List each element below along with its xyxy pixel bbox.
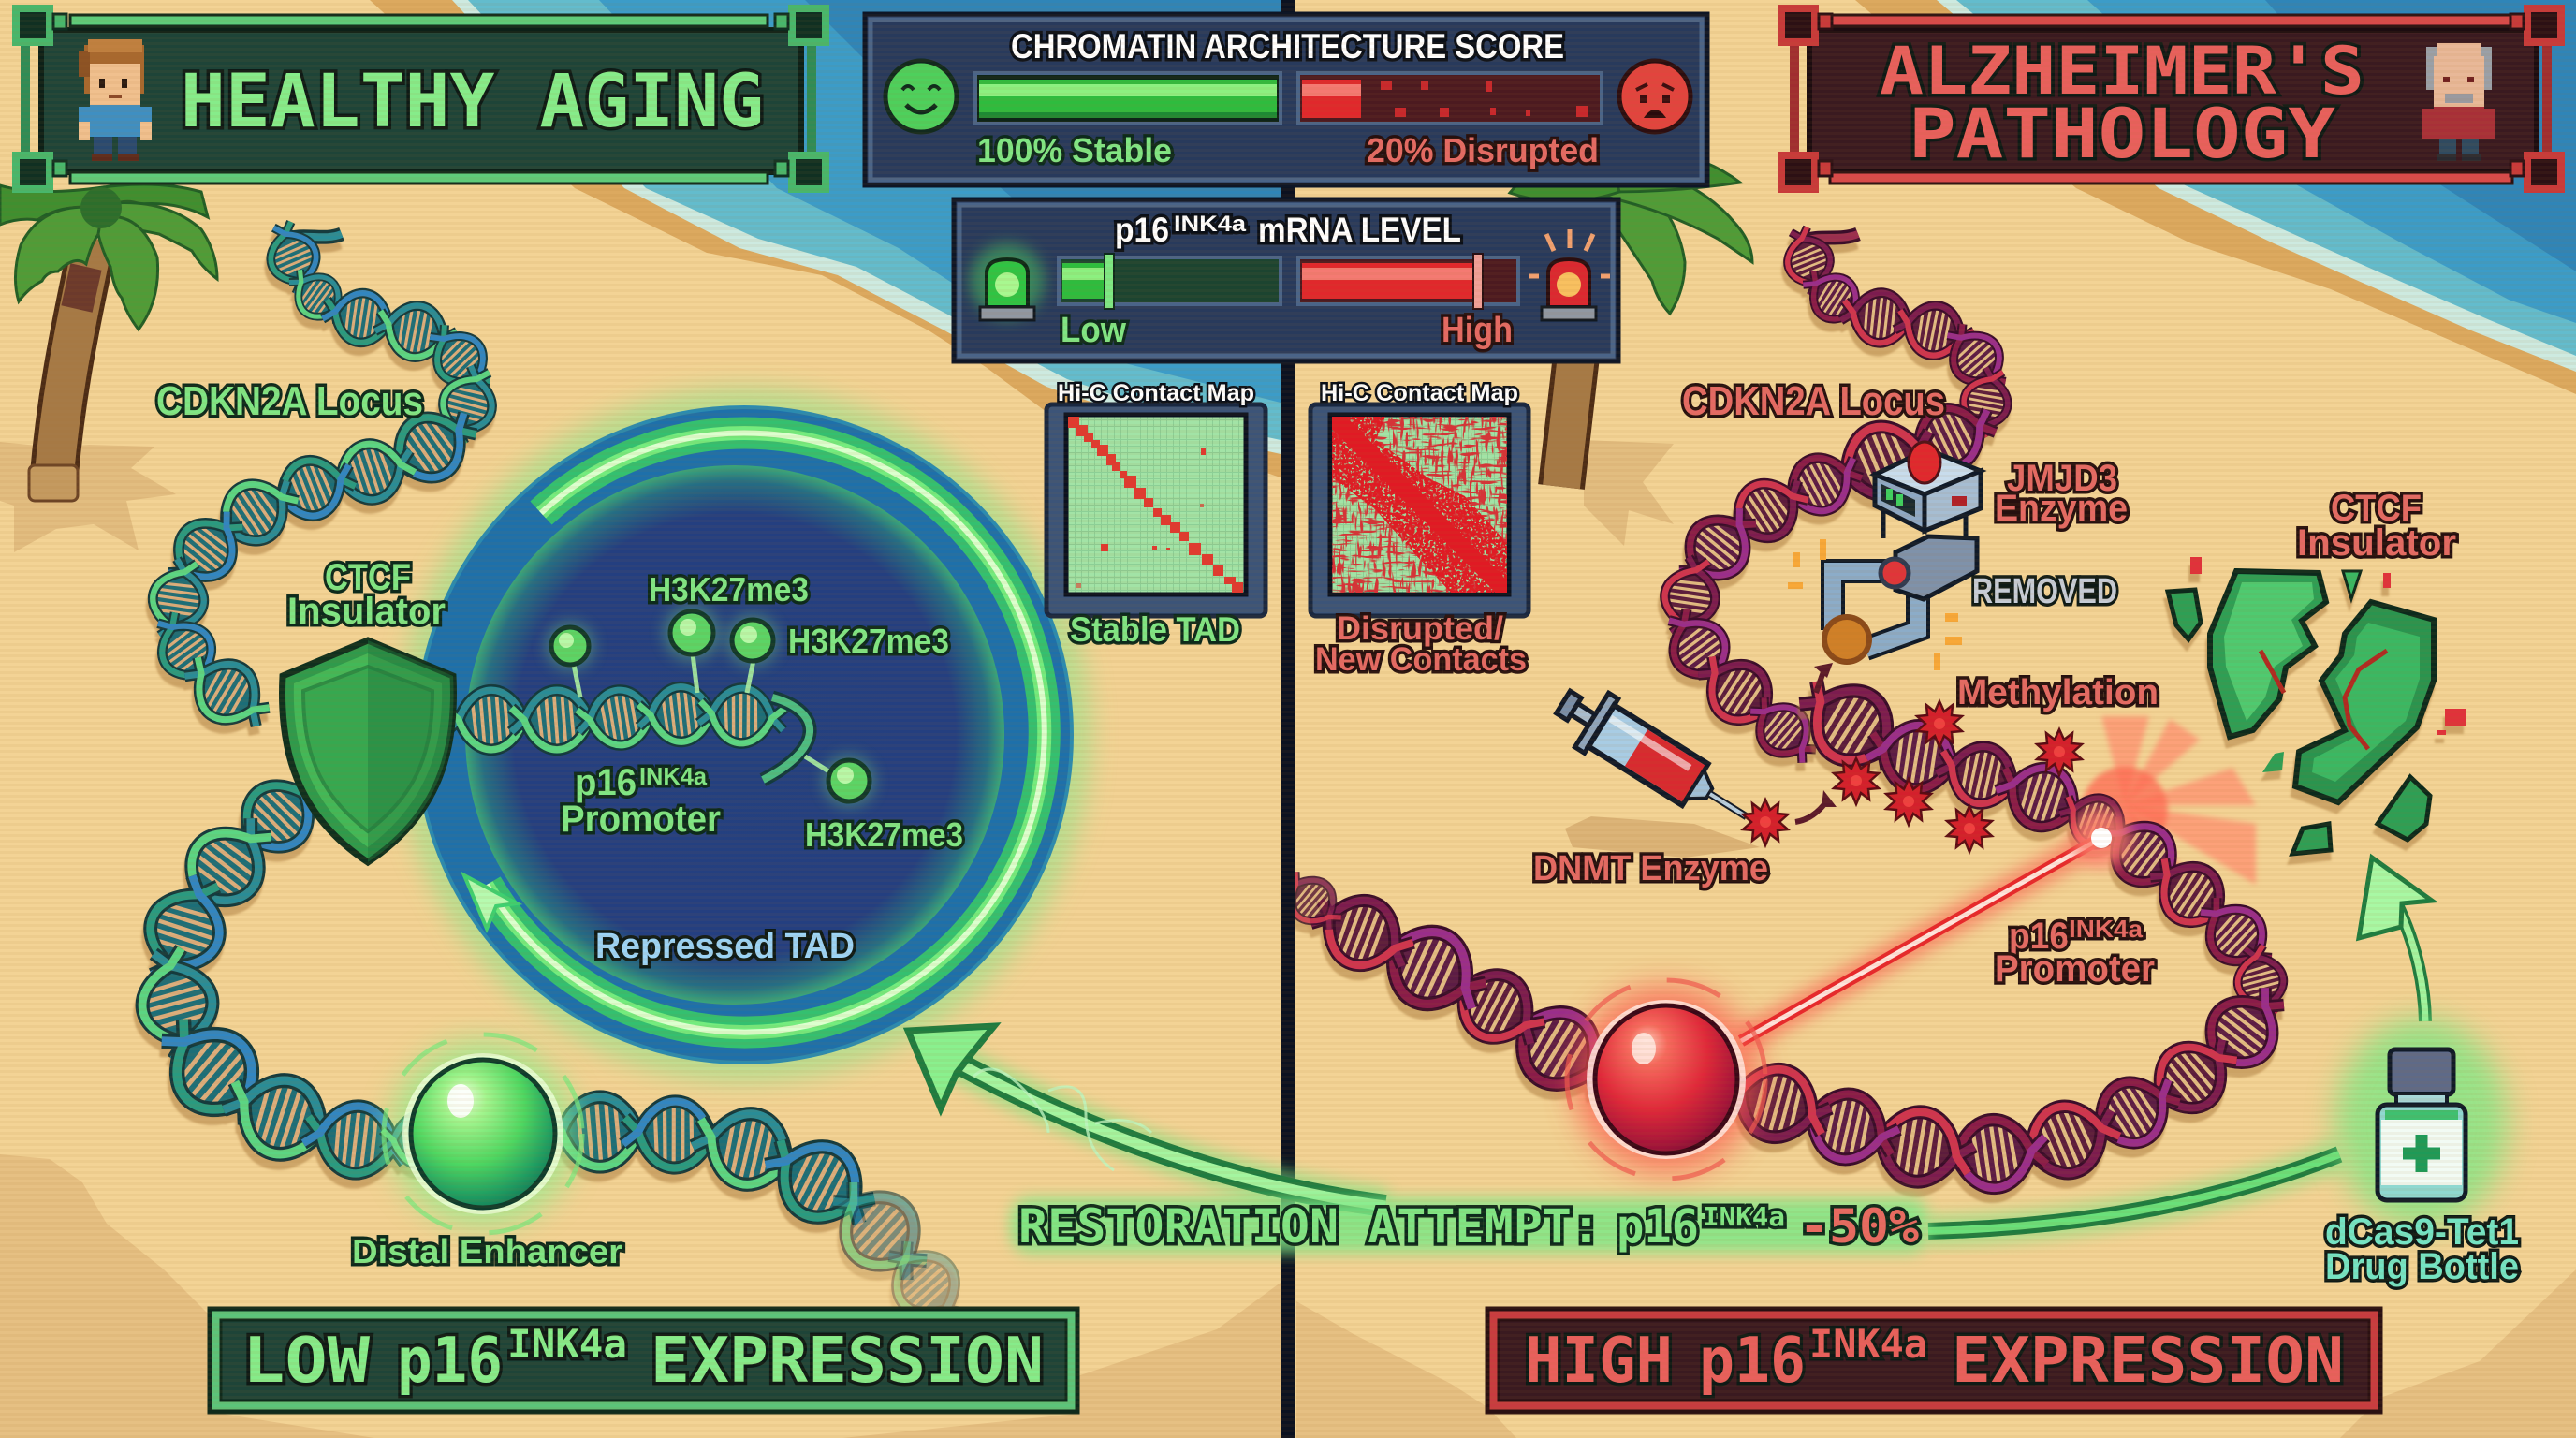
label: p16 promoter healthy: INK4a bbox=[639, 762, 708, 790]
label: JMJD3 Enzyme: Enzyme bbox=[1995, 488, 2128, 529]
Hi-C map: disrupted bbox=[1310, 404, 1529, 616]
label: p16 promoter healthy: Promoter bbox=[561, 799, 721, 840]
banner title: Alzheimer's pathology: PATHOLOGY bbox=[1909, 95, 2335, 174]
arrow head on TAD ring bbox=[464, 875, 517, 929]
DNA: right upper strand bbox=[1656, 224, 2017, 773]
icon: syringe bbox=[1546, 675, 1763, 844]
label: REMOVED: REMOVED bbox=[1972, 572, 2117, 611]
label: Low: Low bbox=[1061, 311, 1126, 350]
label: Disrupted / New Contacts: Disrupted/ bbox=[1337, 610, 1503, 647]
label: H3K27me3 lower: H3K27me3 bbox=[805, 815, 963, 854]
banner: Alzheimer's pathology bbox=[1781, 8, 2561, 189]
icon: dCas9-Tet1 drug bottle bbox=[2335, 1019, 2508, 1228]
label: Hi-C Contact Map left: Hi-C Contact Map bbox=[1058, 380, 1254, 406]
label: p16 promoter disease: p16 bbox=[2009, 916, 2069, 957]
background: right ocean bbox=[1855, 0, 2576, 394]
DNA: left upper strand CDKN2A bbox=[145, 217, 504, 741]
TAD interior disc bbox=[465, 465, 1004, 1005]
label: CDKN2A Locus disease: CDKN2A Locus bbox=[1682, 378, 1945, 424]
footer text: high expression: INK4a bbox=[1809, 1321, 1927, 1367]
banner title: Alzheimer's pathology: ALZHEIMER'S bbox=[1880, 33, 2364, 110]
label: Distal Enhancer: Distal Enhancer bbox=[352, 1232, 622, 1270]
footer banner: low expression bbox=[210, 1309, 1077, 1412]
DNA: left lower strand with enhancer bbox=[132, 761, 976, 1338]
label: Stable TAD: Stable TAD bbox=[1070, 610, 1240, 649]
panel title: p16 mRNA level: INK4a bbox=[1174, 212, 1247, 237]
methylation marks bbox=[1743, 663, 2082, 852]
footer text: high expression: p16 bbox=[1699, 1324, 1806, 1397]
label: High: High bbox=[1442, 311, 1513, 350]
syringe shadow bbox=[1565, 816, 1760, 858]
burst at promoter bbox=[2082, 716, 2256, 899]
restoration label: INK4a bbox=[1703, 1201, 1785, 1232]
bar: high mRNA bbox=[1298, 254, 1518, 309]
label: CDKN2A Locus healthy: CDKN2A Locus bbox=[156, 378, 423, 424]
label: Disrupted / New Contacts: New Contacts bbox=[1315, 641, 1527, 678]
label: H3K27me3 top: H3K27me3 bbox=[649, 570, 809, 609]
label: Hi-C Contact Map right: Hi-C Contact Map bbox=[1321, 380, 1518, 406]
icon: red siren bbox=[1530, 229, 1610, 320]
center divider bbox=[1281, 0, 1295, 1438]
label: DNMT Enzyme: DNMT Enzyme bbox=[1533, 849, 1768, 888]
Hi-C map: stable bbox=[1046, 404, 1266, 616]
panel: chromatin architecture score bbox=[865, 14, 1707, 185]
footer text: high expression: HIGH bbox=[1525, 1324, 1673, 1397]
background: darker sand dunes bbox=[0, 1154, 2576, 1438]
label: dCas9-Tet1 Drug Bottle: dCas9-Tet1 bbox=[2325, 1211, 2519, 1253]
label: CTCF Insulator healthy: CTCF bbox=[325, 557, 411, 598]
label: p16 promoter healthy: p16 bbox=[575, 762, 637, 803]
icon: CTCF shield bbox=[282, 640, 454, 862]
palm tree: left bbox=[0, 184, 217, 552]
distal enhancer sphere bbox=[384, 1034, 582, 1233]
DNA: promoter inside TAD bbox=[446, 684, 810, 780]
panel title: p16 mRNA level: p16 bbox=[1115, 211, 1169, 249]
background: left ocean bbox=[370, 0, 1281, 477]
TAD loop: glowing ring bbox=[415, 405, 1074, 1064]
pathological enhancer sphere bbox=[1567, 980, 1765, 1179]
icon: young man bbox=[79, 39, 152, 161]
label: Repressed TAD: Repressed TAD bbox=[595, 927, 855, 966]
restoration label: -50% bbox=[1799, 1199, 1919, 1254]
icon: JMJD3 enzyme robot bbox=[1788, 442, 1981, 670]
panel title: p16 mRNA level: mRNA LEVEL bbox=[1258, 211, 1461, 249]
green restoration arrow: from bottle bbox=[1928, 1154, 2339, 1231]
footer text: low expression: EXPRESSION bbox=[651, 1324, 1044, 1397]
icon: sad face bbox=[1619, 61, 1690, 132]
label: CTCF Insulator disease: Insulator bbox=[2297, 522, 2456, 564]
icon: happy face bbox=[886, 61, 957, 132]
label: 100% Stable: 100% Stable bbox=[977, 131, 1172, 169]
restoration label: p16 bbox=[1617, 1199, 1699, 1254]
bar: disrupted bbox=[1298, 73, 1602, 124]
label: p16 promoter disease: INK4a bbox=[2069, 915, 2144, 943]
label: JMJD3 Enzyme: JMJD3 bbox=[2007, 458, 2117, 499]
label: 20% Disrupted: 20% Disrupted bbox=[1367, 131, 1599, 169]
DNA: right methylated strand and loop bbox=[1275, 664, 2298, 1194]
laser beam from enhancer to promoter bbox=[1741, 808, 2131, 1041]
palm tree: right bbox=[1510, 151, 1752, 546]
panel: p16 mRNA level bbox=[954, 199, 1618, 361]
footer text: high expression: EXPRESSION bbox=[1952, 1324, 2344, 1397]
icon: green siren bbox=[970, 243, 1045, 320]
panel title: chromatin architecture score: CHROMATIN ARCHITECTURE SCORE bbox=[1011, 27, 1564, 66]
label: dCas9-Tet1 Drug Bottle: Drug Bottle bbox=[2325, 1246, 2519, 1287]
bar: low mRNA bbox=[1059, 254, 1281, 309]
label: H3K27me3 middle: H3K27me3 bbox=[788, 622, 949, 660]
label: p16 promoter disease: Promoter bbox=[1995, 948, 2155, 990]
methyl mark lollipops bbox=[546, 605, 875, 807]
footer text: low expression: LOW bbox=[242, 1324, 371, 1397]
bar: stable bbox=[975, 73, 1281, 124]
banner title: healthy aging: HEALTHY AGING bbox=[181, 60, 764, 144]
green arrow: bottle to shield bbox=[2359, 858, 2432, 1021]
restoration glow band bbox=[1011, 1198, 1928, 1253]
footer text: low expression: p16 bbox=[397, 1324, 503, 1397]
footer banner: high expression bbox=[1487, 1309, 2380, 1412]
icon: broken CTCF shield bbox=[2168, 557, 2466, 854]
restoration label: RESTORATION ATTEMPT: bbox=[1018, 1199, 1601, 1254]
green restoration arrow: to healthy TAD bbox=[908, 1026, 1385, 1206]
footer text: low expression: INK4a bbox=[507, 1321, 627, 1367]
banner: healthy aging bbox=[16, 8, 826, 189]
label: Methylation: Methylation bbox=[1957, 673, 2159, 712]
label: CTCF Insulator healthy: Insulator bbox=[287, 591, 446, 632]
icon: old man bbox=[2422, 43, 2496, 161]
label: CTCF Insulator disease: CTCF bbox=[2331, 488, 2422, 529]
